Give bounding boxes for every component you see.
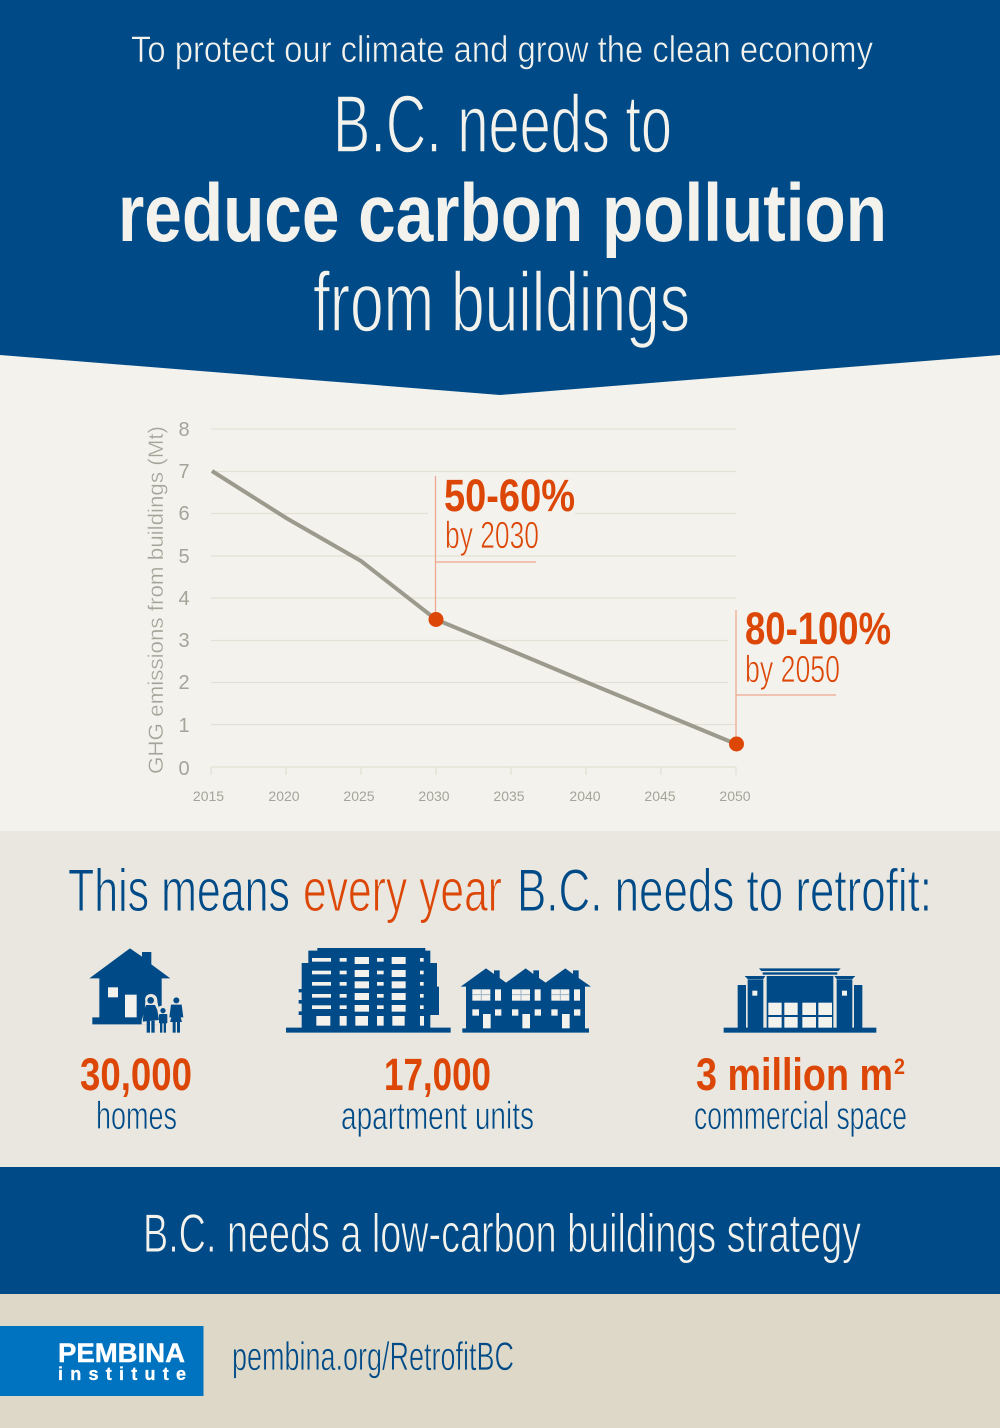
panel: footer <box>0 1294 1000 1428</box>
icon: row of townhouses <box>461 968 591 1033</box>
y axis labels <box>178 419 190 780</box>
stat: commercial space: commercial space <box>694 1095 907 1138</box>
stat: commercial space: 2 <box>894 1054 905 1079</box>
stat: apartment units: apartment units <box>341 1095 534 1138</box>
logo: Pembina Institute: institute <box>58 1364 186 1384</box>
callout: 2030 target <box>428 470 575 627</box>
x axis labels: 2015 <box>193 788 224 804</box>
title line 1: B.C. needs to <box>333 79 672 170</box>
stat: apartment units: 17,000 <box>384 1049 491 1100</box>
callout: 2050 target: by 2050 <box>745 649 840 691</box>
y axis labels: 3 <box>178 630 190 652</box>
panel: strategy banner <box>0 1167 1000 1294</box>
title kicker: To protect our climate and grow the clean economy <box>131 29 873 70</box>
y axis labels: 8 <box>178 419 190 441</box>
y axis labels: 4 <box>178 588 190 610</box>
icon: house with family <box>89 948 187 1034</box>
y axis labels: 0 <box>178 758 190 780</box>
stat: homes: homes <box>96 1095 177 1138</box>
x axis labels: 2020 <box>268 788 300 804</box>
stat: commercial space: 3 million m <box>696 1049 893 1100</box>
y axis labels: 2 <box>178 672 190 694</box>
x axis labels: 2035 <box>493 788 525 804</box>
icon: apartment tower <box>286 948 451 1033</box>
y axis title: GHG emissions from buildings (Mt) <box>145 426 168 774</box>
line chart: GHG emissions from buildings <box>145 419 891 804</box>
section heading <box>68 857 932 924</box>
stat: apartment units <box>341 1049 534 1138</box>
y axis labels: 5 <box>178 546 190 568</box>
stat: commercial space <box>694 1049 907 1138</box>
x axis labels: 2040 <box>569 788 601 804</box>
panel: annual retrofit targets <box>0 831 1000 1167</box>
callout: 2030 target: by 2030 <box>445 515 539 557</box>
section heading: This means <box>68 857 290 924</box>
x axis labels: 2045 <box>644 788 676 804</box>
callout: 2050 target <box>729 603 891 752</box>
callout: 2050 target: 80-100% <box>745 603 891 654</box>
website link: pembina.org/RetrofitBC <box>232 1335 514 1379</box>
logo: Pembina Institute: PEMBINA <box>58 1338 185 1368</box>
y axis labels: 6 <box>178 503 190 525</box>
icon: commercial building <box>724 968 876 1033</box>
emissions trend line <box>212 471 736 744</box>
callout: 2030 target: 50-60% <box>444 470 575 521</box>
x axis labels: 2050 <box>719 788 751 804</box>
panel: header banner <box>0 0 1000 395</box>
section heading: every year <box>303 857 502 924</box>
stat: homes: 30,000 <box>80 1049 192 1100</box>
logo: Pembina Institute <box>0 1326 204 1396</box>
stat: homes <box>80 1049 192 1138</box>
title line 3: from buildings <box>313 255 690 349</box>
y axis labels: 1 <box>178 715 190 737</box>
x axis labels <box>193 788 751 804</box>
y axis labels: 7 <box>178 461 190 483</box>
x axis labels: 2030 <box>418 788 450 804</box>
x axis labels: 2025 <box>343 788 375 804</box>
